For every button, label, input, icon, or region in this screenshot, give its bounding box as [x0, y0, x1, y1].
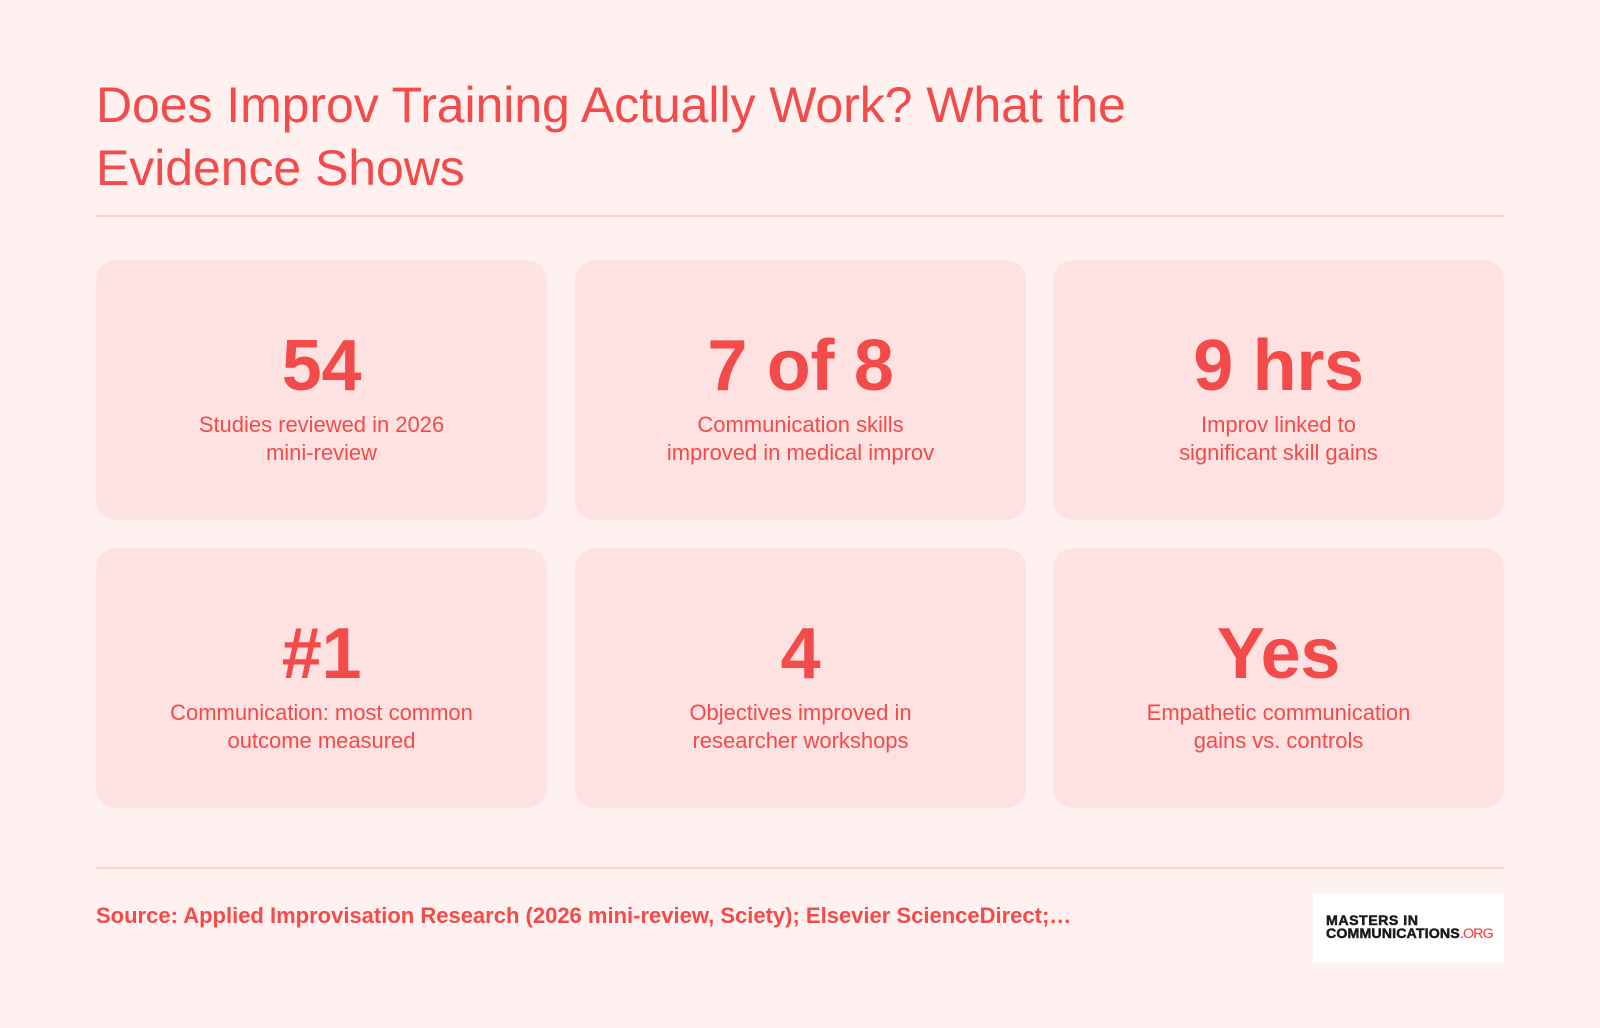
stat label: researcher workshops	[692, 728, 909, 753]
stat card: 9 hrs	[1053, 260, 1504, 520]
stat label: Empathetic communication	[1147, 700, 1410, 725]
stat card: 54 studies	[96, 260, 547, 520]
stat label	[170, 700, 473, 753]
stat number: 7 of 8	[707, 326, 894, 406]
stat label: mini-review	[266, 440, 377, 465]
stat label	[689, 700, 912, 753]
source text: Source: Applied Improvisation Research (2026 mini-review, Sciety); Elsevier ScienceDirect;…	[96, 903, 1071, 928]
stat card: yes empathetic	[1053, 548, 1504, 808]
stat number: 4	[781, 614, 820, 694]
stat card: #1 outcome	[96, 548, 547, 808]
stat label: significant skill gains	[1179, 440, 1378, 465]
stat label: Objectives improved in	[689, 700, 912, 725]
stat label: gains vs. controls	[1194, 728, 1363, 753]
logo: Masters in Communications.org: MASTERS IN	[1326, 913, 1418, 929]
stat label	[1147, 700, 1410, 753]
stat label: Communication skills	[697, 412, 904, 437]
stat label	[667, 412, 934, 465]
stat label: Studies reviewed in 2026	[199, 412, 444, 437]
logo: Masters in Communications.org	[1313, 893, 1504, 963]
stat label: Communication: most common	[170, 700, 473, 725]
stat number: #1	[282, 614, 361, 694]
logo: Masters in Communications.org: COMMUNICATIONS.ORG	[1326, 926, 1493, 942]
title: Does Improv Training Actually Work? What the Evidence Shows	[96, 77, 1126, 196]
stat card: 4 objectives	[575, 548, 1026, 808]
stat label	[199, 412, 444, 465]
stat label: outcome measured	[227, 728, 416, 753]
stat label: Improv linked to	[1201, 412, 1356, 437]
stat label: improved in medical improv	[667, 440, 934, 465]
stat number: Yes	[1217, 614, 1340, 694]
stat number: 9 hrs	[1193, 326, 1364, 406]
stat card: 7 of 8 skills	[575, 260, 1026, 520]
stat label	[1179, 412, 1378, 465]
stat number: 54	[282, 326, 361, 406]
